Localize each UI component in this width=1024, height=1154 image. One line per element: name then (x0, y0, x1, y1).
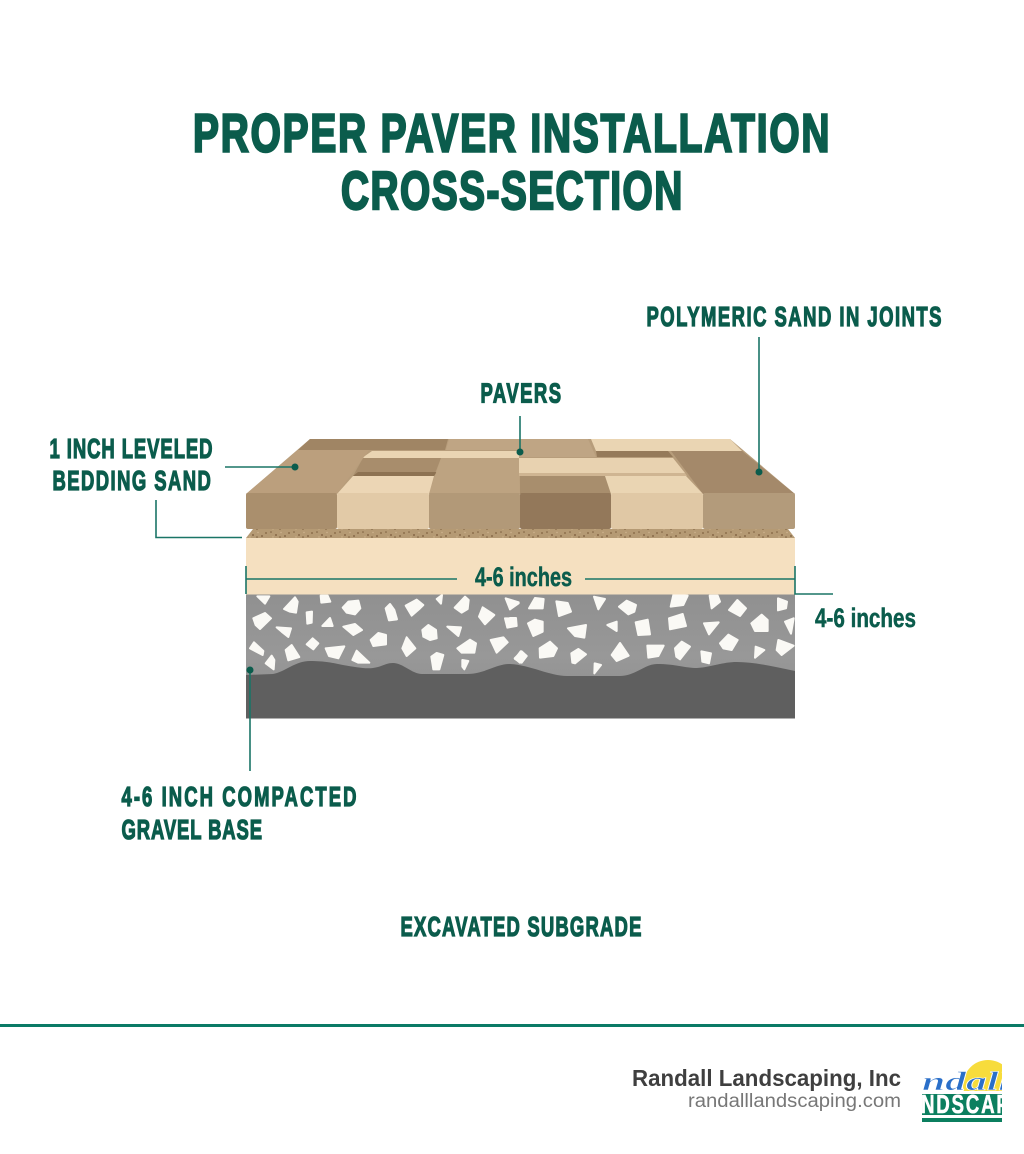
pavers (246, 439, 795, 529)
layer: excavated subgrade and gravel base (246, 594, 795, 718)
callout: compacted gravel base: GRAVEL BASE (122, 815, 262, 846)
gravel stones, left half (250, 595, 527, 669)
dimension label: gravel thickness: 4-6 inches (815, 603, 916, 633)
logo: ndall (922, 1067, 1011, 1096)
callout: bedding sand (50, 434, 298, 538)
callout: compacted gravel base (122, 666, 356, 846)
label: excavated subgrade: EXCAVATED SUBGRADE (400, 912, 641, 943)
dimension: base sand thickness (246, 562, 833, 594)
callout: polymeric sand in joints: POLYMERIC SAND IN JOINTS (646, 302, 942, 333)
callout: compacted gravel base: 4-6 INCH COMPACTED (122, 782, 356, 813)
callout: pavers (480, 379, 561, 456)
callout: polymeric sand in joints (646, 302, 942, 476)
gravel stones, right half (510, 595, 794, 673)
layer: bedding sand (246, 529, 795, 538)
logo: NDSCAP (921, 1089, 1009, 1119)
footer website: randalllandscaping.com (688, 1091, 901, 1112)
title (193, 102, 829, 220)
dimension: base sand thickness: 4-6 inches (475, 562, 572, 592)
callout: bedding sand: BEDDING SAND (52, 466, 211, 497)
callout: bedding sand: 1 INCH LEVELED (50, 434, 213, 465)
callout: pavers: PAVERS (480, 379, 561, 410)
title: CROSS-SECTION (341, 160, 682, 220)
layer: base sand (246, 538, 795, 594)
logo (922, 1060, 1002, 1122)
footer company name: Randall Landscaping, Inc (632, 1065, 901, 1091)
footer rule (0, 1024, 1024, 1027)
title: PROPER PAVER INSTALLATION (193, 102, 829, 163)
cross-section diagram (246, 439, 795, 718)
